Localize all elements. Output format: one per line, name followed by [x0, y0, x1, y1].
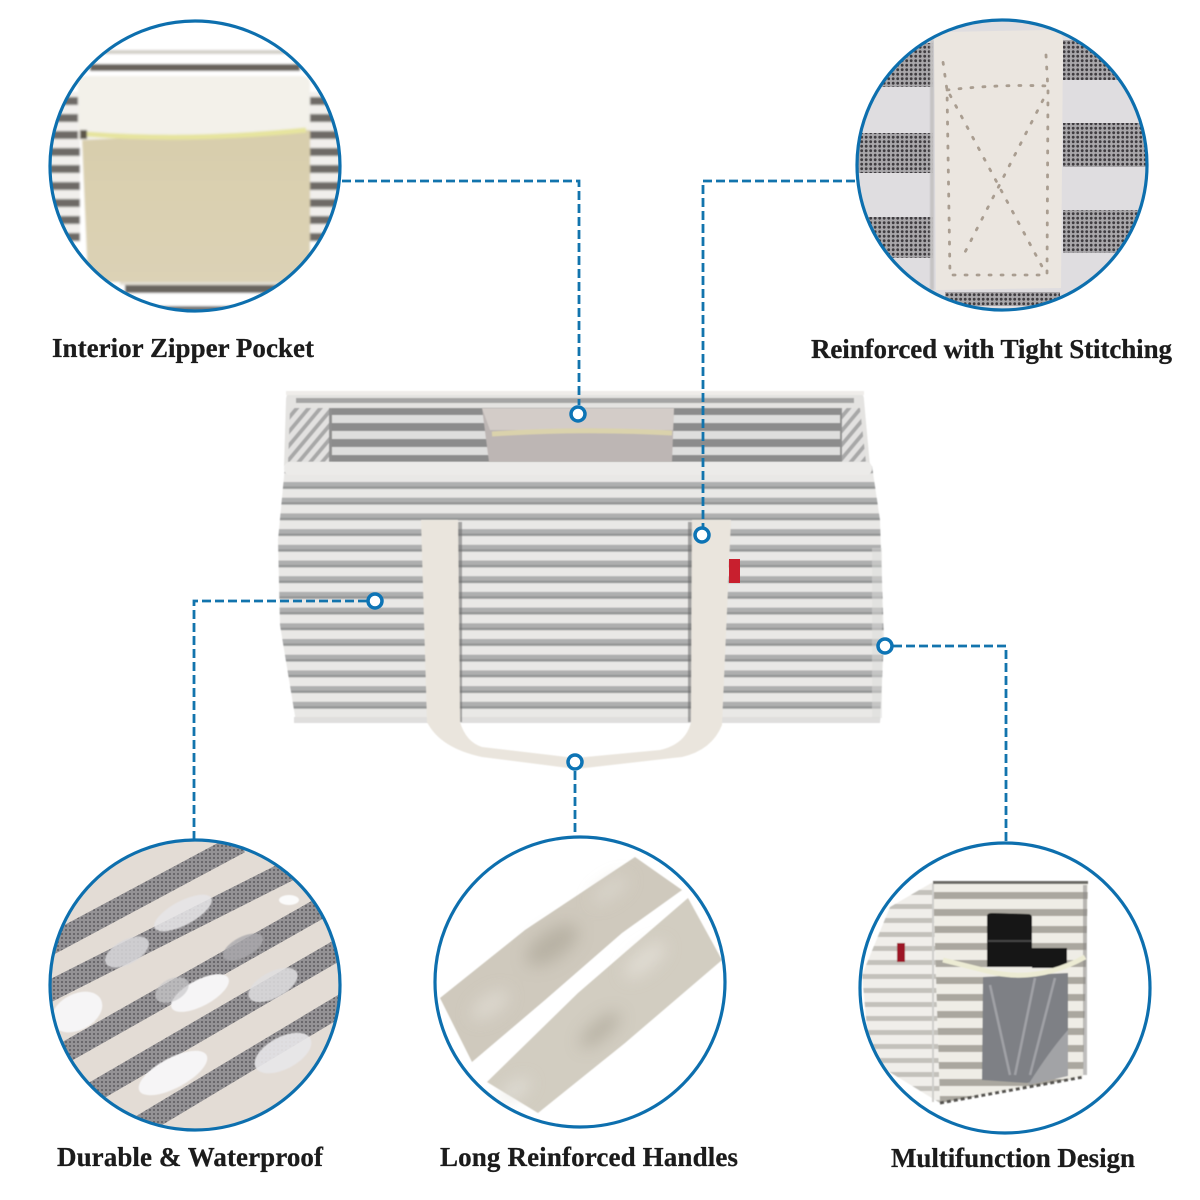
bag front striped body — [278, 462, 884, 723]
panel: long reinforced handles — [435, 837, 725, 1127]
marker: side pocket — [878, 639, 892, 653]
long handles — [421, 520, 731, 769]
marker: handle — [568, 755, 582, 769]
connector: stitching — [703, 181, 855, 527]
label: multifunction design: Multifunction Design — [891, 1143, 1135, 1173]
marker: stitching — [695, 528, 709, 542]
connector: handles — [574, 771, 576, 838]
main product: striped tote bag — [278, 391, 884, 769]
connector: multifunction — [893, 646, 1006, 843]
panel: multifunction design — [860, 843, 1150, 1133]
connector: waterproof — [194, 601, 367, 842]
pocket photo — [52, 49, 338, 310]
bottles — [987, 913, 1032, 967]
red brand tag — [729, 559, 740, 583]
panel: reinforced stitching — [855, 18, 1153, 313]
panel: interior zipper pocket — [50, 21, 340, 312]
stitch lines — [942, 55, 1048, 275]
marker: body fabric — [368, 594, 382, 608]
mesh pocket — [982, 973, 1068, 1083]
label: reinforced stitching: Reinforced with Tight Stitching — [811, 334, 1172, 364]
water droplets — [54, 894, 312, 1096]
interior zipper pocket on bag — [482, 408, 674, 462]
bag interior back wall — [284, 391, 870, 466]
pocket ring — [50, 21, 340, 311]
handle straps — [440, 857, 722, 1113]
multifunction ring — [860, 843, 1150, 1133]
waterproof ring — [50, 840, 340, 1130]
marker: pocket — [571, 407, 585, 421]
label: durable and waterproof: Durable & Waterproof — [57, 1142, 324, 1172]
side pocket photo — [862, 881, 1088, 1103]
handles ring — [435, 837, 725, 1127]
panel: durable and waterproof — [40, 840, 350, 1130]
label: interior zipper pocket: Interior Zipper Pocket — [52, 333, 314, 363]
strap shading — [476, 886, 661, 1102]
connector: interior pocket — [342, 181, 579, 405]
fabric photo — [40, 840, 350, 1130]
stitching photo — [855, 18, 1153, 313]
stitching ring — [857, 20, 1147, 310]
label: long handles: Long Reinforced Handles — [440, 1142, 738, 1172]
